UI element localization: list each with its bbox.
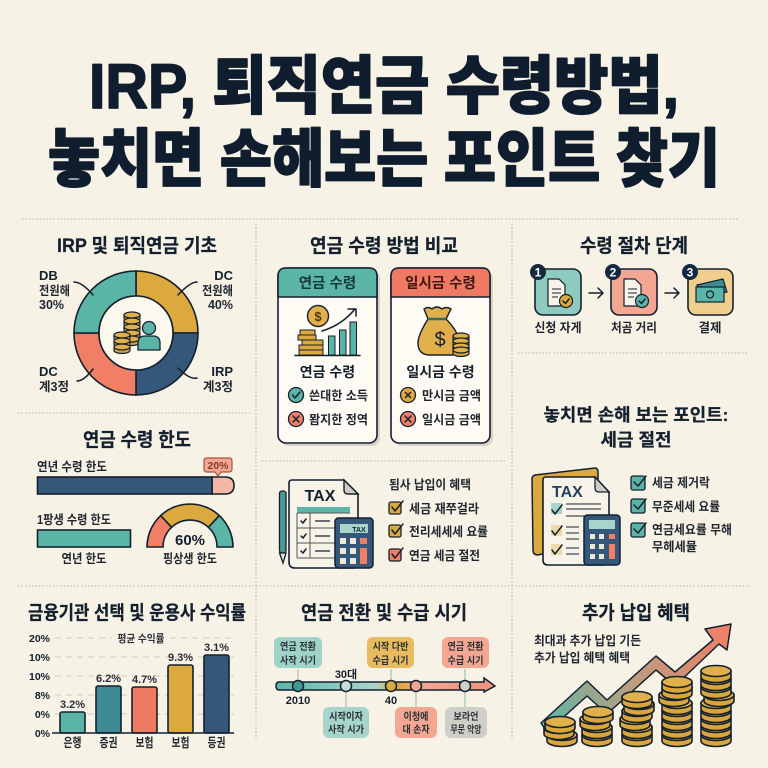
label: lifetime limit: 1팡생 수령 한도 (37, 512, 111, 527)
step 1: 1 (535, 266, 542, 280)
panel: timeline (274, 602, 495, 738)
panel: additional contribution benefits (534, 602, 734, 746)
title: IRP, 퇴직연금 수령방법, (89, 52, 679, 122)
chart legend: 평균 수익률 (118, 633, 165, 645)
heading: 추가 납입 혜택 (582, 602, 690, 624)
box: transfer: 대 손자 (402, 723, 430, 736)
bar labels: 은행 (64, 735, 82, 750)
gauge value: 60% (175, 532, 205, 549)
item: pension tax rate: 연금세요률 무해 (652, 522, 732, 537)
bar: annual limit (38, 477, 234, 494)
bar values: 4.7% (132, 674, 157, 686)
donut chart (74, 271, 198, 395)
label: DC plan 3: 계3정 (39, 380, 69, 394)
bar labels: 보험 (172, 735, 190, 750)
panel: tax saving points: 세금 절전 (600, 430, 672, 450)
card subheading: 일시금 수령 (406, 364, 475, 380)
card header: 일시금 수령 (405, 275, 476, 292)
label: DB: 30% (39, 298, 64, 312)
box: start benefit (367, 637, 414, 668)
card header: 연금 수령 (299, 275, 356, 292)
step 2 (605, 264, 657, 335)
icon: coins and growth chart (295, 306, 360, 356)
description (534, 633, 641, 665)
label: DC 40% (202, 268, 234, 312)
icon: pen (280, 491, 286, 563)
panel: method comparison (278, 235, 493, 446)
bar values (60, 642, 229, 711)
item: tax deduction: 세금 재쭈걸라 (409, 501, 479, 516)
heading: 됨사 납입이 혜택 (389, 478, 471, 492)
card: annuity (278, 268, 380, 446)
box: other (445, 707, 487, 738)
label: IRP plan 3: IRP (211, 364, 233, 379)
item: first (400, 388, 481, 403)
label: DC 40%: 전원해 (202, 283, 233, 298)
timeline labels: 40 (385, 695, 397, 707)
panel: procedure steps (530, 235, 733, 335)
icon: tax documents with calculator: TAX (552, 484, 583, 501)
box: interest: 사작 시가 (328, 723, 364, 736)
item: second (400, 412, 481, 427)
label: annual: 연년 한도 (62, 551, 106, 566)
arrow (665, 288, 679, 298)
item: saving: 연금 세금 절전 (409, 549, 480, 563)
label: lifetime: 핑상생 한도 (163, 551, 217, 566)
bar values: 9.3% (168, 652, 193, 664)
y axis: 0% (35, 709, 51, 721)
step 3: 결제 (698, 320, 722, 335)
box: interest: 시작이자 (329, 711, 363, 723)
heading: 연금 수령 방법 비교 (310, 235, 458, 257)
y axis (29, 633, 51, 740)
item: con (288, 412, 368, 427)
bar labels: 증권 (100, 736, 118, 750)
panel: pension limits (37, 429, 234, 566)
item: saving (389, 548, 480, 563)
box: start benefit: 수급 시기 (372, 654, 408, 667)
step 2: 처곰 거리 (611, 320, 657, 335)
icon: money bag (418, 307, 469, 356)
box: other: 무문 악앙 (450, 723, 482, 736)
y axis: 8% (35, 690, 51, 702)
panel: tax saving points (532, 405, 732, 565)
icon: money bag: $ (434, 329, 446, 351)
bar labels (64, 735, 226, 750)
label: DC 40%: 40% (208, 298, 233, 312)
description: 추가 납입 혜택 혜택 (534, 650, 630, 665)
step 3 (682, 264, 733, 335)
item: deduction (631, 475, 710, 490)
box: start (274, 637, 322, 668)
panel: IRP basics (39, 235, 234, 395)
title (48, 52, 720, 195)
item: rate: 전리세세세 요률 (409, 525, 488, 539)
timeline labels: 30대 (335, 667, 357, 681)
callout: 20%: 20% (207, 460, 229, 472)
label: DC plan 3 (39, 364, 69, 394)
label: annual limit: 연년 수령 한도 (37, 459, 107, 474)
panel: returns bar chart (28, 602, 246, 750)
description: 최대과 추가 납입 기든 (534, 633, 641, 648)
box: start: 사작 시기 (280, 654, 316, 667)
timeline arrow (276, 678, 495, 692)
bar values: 3.1% (204, 642, 229, 654)
box: interest (323, 707, 369, 738)
step 3: 3 (687, 266, 694, 280)
label: DC 40%: DC (214, 268, 234, 283)
item: con: 뫔지한 정역 (309, 412, 368, 427)
heading: 연금 전환 및 수급 시기 (301, 602, 467, 624)
heading: IRP 및 퇴직연금 기초 (57, 235, 217, 257)
y axis: 0% (35, 728, 51, 740)
bar labels: 보험 (136, 735, 154, 750)
panel: tax benefits (280, 478, 488, 568)
y axis: 10% (29, 671, 51, 683)
timeline labels: 2010 (286, 695, 310, 707)
card: lump sum (391, 268, 493, 446)
step 1 (530, 264, 582, 335)
box: conversion: 수급 시기 (448, 654, 484, 667)
icon: tax document (289, 480, 358, 568)
x axis line (52, 732, 234, 734)
item: first: 만시금 금액 (422, 389, 481, 403)
arrow (589, 288, 603, 298)
heading: 금융기관 선택 및 운용사 수익률 (28, 602, 246, 624)
label: DB: 전원해 (39, 283, 70, 298)
item: pro: 쓴대한 소득 (309, 388, 368, 403)
box: transfer: 이청에 (404, 710, 428, 723)
label: DB: DB (39, 268, 58, 283)
icon: tax document: TAX (305, 488, 336, 505)
heading: 놓치면 손해 보는 포인트: (544, 405, 728, 425)
label: IRP plan 3: 계3정 (203, 380, 233, 394)
bar labels: 등권 (208, 736, 226, 750)
y axis: 10% (29, 652, 51, 664)
card subheading: 연금 수령 (300, 364, 355, 380)
timeline labels (286, 667, 397, 707)
icon: calculator (335, 518, 373, 568)
icon: coins and growth chart: $ (314, 309, 322, 324)
box: conversion (442, 637, 489, 668)
coin stacks (544, 666, 734, 746)
box: conversion: 연금 전환 (448, 640, 484, 653)
box: other: 보라언 (454, 711, 478, 723)
label: IRP plan 3 (203, 364, 233, 394)
icon: tax documents with calculator (532, 468, 620, 565)
label: DC plan 3: DC (39, 364, 58, 379)
bar values: 6.2% (96, 673, 121, 685)
bar values: 3.2% (60, 699, 85, 711)
gauge (147, 504, 233, 547)
item: rate: 무준세세 요률 (652, 500, 720, 514)
item: pro (288, 388, 368, 403)
bars (60, 655, 229, 733)
icon: coins and person (114, 312, 160, 354)
step 1: 신청 자게 (534, 320, 582, 335)
rising arrow (541, 624, 731, 732)
item: deduction: 세금 제거락 (652, 475, 710, 490)
step 2: 2 (610, 266, 617, 280)
bar: lifetime limit (38, 530, 130, 547)
y axis: 20% (29, 633, 51, 645)
item: second: 일시금 금액 (422, 413, 481, 427)
item: pension tax rate: 무헤세뮬 (652, 540, 697, 554)
box: start: 연금 전환 (280, 640, 316, 653)
item: pension tax rate (631, 522, 732, 554)
item: rate (631, 499, 720, 514)
callout: 20% (204, 458, 232, 476)
heading: 연금 수령 한도 (83, 429, 191, 451)
heading: 수령 절차 단계 (580, 235, 688, 257)
label: DB (39, 268, 70, 312)
icon: calculator: TAX (352, 527, 366, 534)
box: transfer (395, 707, 437, 738)
box: start benefit: 시작 다반 (372, 640, 408, 653)
